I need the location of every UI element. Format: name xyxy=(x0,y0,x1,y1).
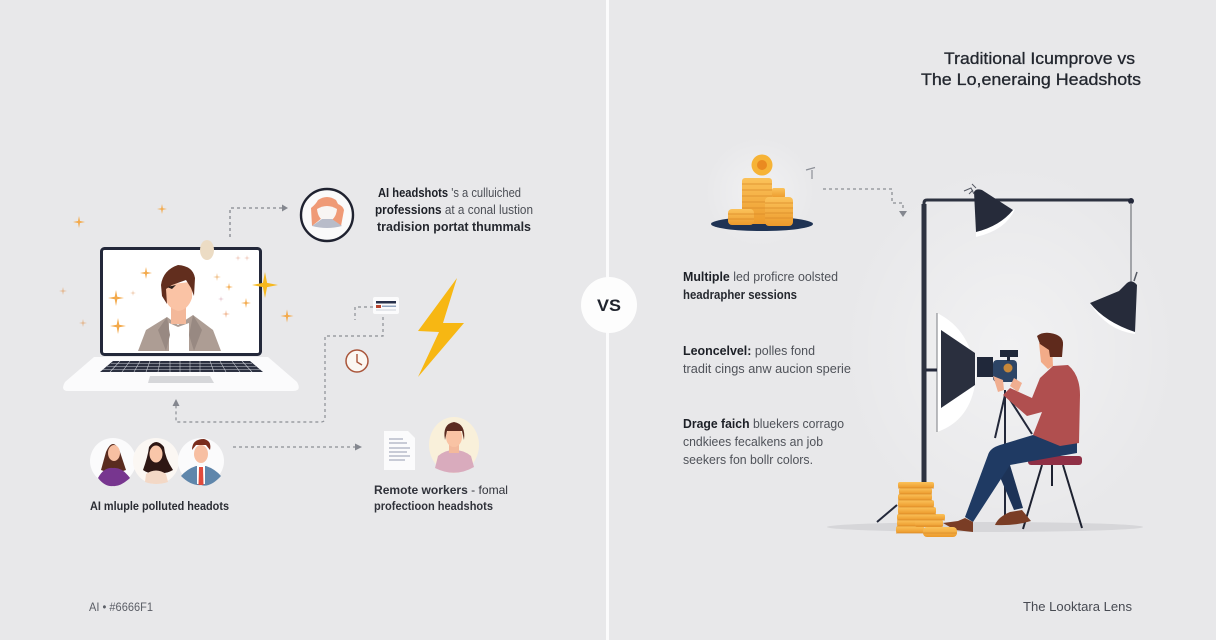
laptop base xyxy=(63,357,299,391)
text: first point: Multiple led proficre oolsted xyxy=(683,270,838,284)
icon: portrait thumbnail xyxy=(301,189,353,241)
coin pile xyxy=(896,482,957,537)
coin stack icon xyxy=(704,136,816,248)
dashed arrow to studio xyxy=(823,189,907,217)
webcam bump xyxy=(200,240,214,260)
camera xyxy=(977,350,1018,382)
lightning bolt xyxy=(418,278,464,377)
text: third point xyxy=(683,417,844,467)
laptop with portrait xyxy=(59,204,299,391)
small arrow stub xyxy=(806,168,815,179)
far leg and shoe xyxy=(990,465,1023,510)
icon: document xyxy=(384,431,415,470)
portrait xyxy=(138,265,221,351)
hands xyxy=(993,376,1022,392)
text: third point: seekers fon bollr colors. xyxy=(683,453,813,467)
photo studio scene xyxy=(827,184,1143,537)
footer left: AI • #6666F1 xyxy=(89,600,153,614)
text: second point: Leoncelvel: polles fond xyxy=(683,344,815,358)
text: second point xyxy=(683,344,851,376)
avatar: remote worker xyxy=(429,417,479,473)
laptop screen xyxy=(102,248,260,354)
hanging lamp xyxy=(1090,272,1137,334)
sparkles xyxy=(59,204,294,334)
text: AI headshots description: tradision portat thummals xyxy=(377,220,531,234)
dashed connector with arrow xyxy=(172,307,383,422)
caption: remote workers: Remote workers - fomal xyxy=(374,483,508,497)
softbox xyxy=(926,313,976,432)
text: AI headshots description xyxy=(375,186,533,234)
text: AI headshots description: professions at a conal lustion xyxy=(375,203,533,217)
tripod xyxy=(995,390,1032,523)
VS badge: VS xyxy=(597,296,621,315)
caption: remote workers xyxy=(374,483,508,513)
arrow: laptop to icon xyxy=(230,204,288,237)
torso and arm xyxy=(1003,365,1080,446)
soft studio glow xyxy=(840,160,1180,540)
text: AI headshots description: AI headshots 's a culluiched xyxy=(378,186,521,200)
avatars group xyxy=(90,438,224,486)
stool xyxy=(1023,456,1082,529)
text: first point xyxy=(683,270,838,302)
avatar: woman purple xyxy=(90,438,136,486)
light stand xyxy=(924,200,1131,482)
caption: remote workers: profectioon headshots xyxy=(374,499,493,513)
text: third point: cndkiees fecalkens an job xyxy=(683,435,823,449)
text: third point: Drage faich bluekers corrago xyxy=(683,417,844,431)
title xyxy=(921,50,1141,89)
centre divider xyxy=(606,0,609,640)
near leg xyxy=(965,435,1077,522)
VS badge xyxy=(581,277,637,333)
text: second point: tradit cings anw aucion sperie xyxy=(683,362,851,376)
footer right: The Looktara Lens xyxy=(1023,600,1132,614)
icon: clock xyxy=(346,350,368,372)
text: first point: headrapher sessions xyxy=(683,288,797,302)
head xyxy=(1039,343,1053,369)
avatar: woman long hair xyxy=(133,438,179,484)
title: The Lo,eneraing Headshots xyxy=(921,71,1141,89)
floor shadow xyxy=(827,522,1143,532)
title: Traditional Icumprove vs xyxy=(944,50,1135,68)
avatar: man with tie xyxy=(178,438,224,486)
icon: small card xyxy=(373,297,399,314)
caption: avatars: AI mluple polluted headots xyxy=(90,499,229,513)
arrow: avatars to document xyxy=(233,444,362,450)
near shoe xyxy=(943,518,973,532)
top lamp xyxy=(964,184,1015,237)
